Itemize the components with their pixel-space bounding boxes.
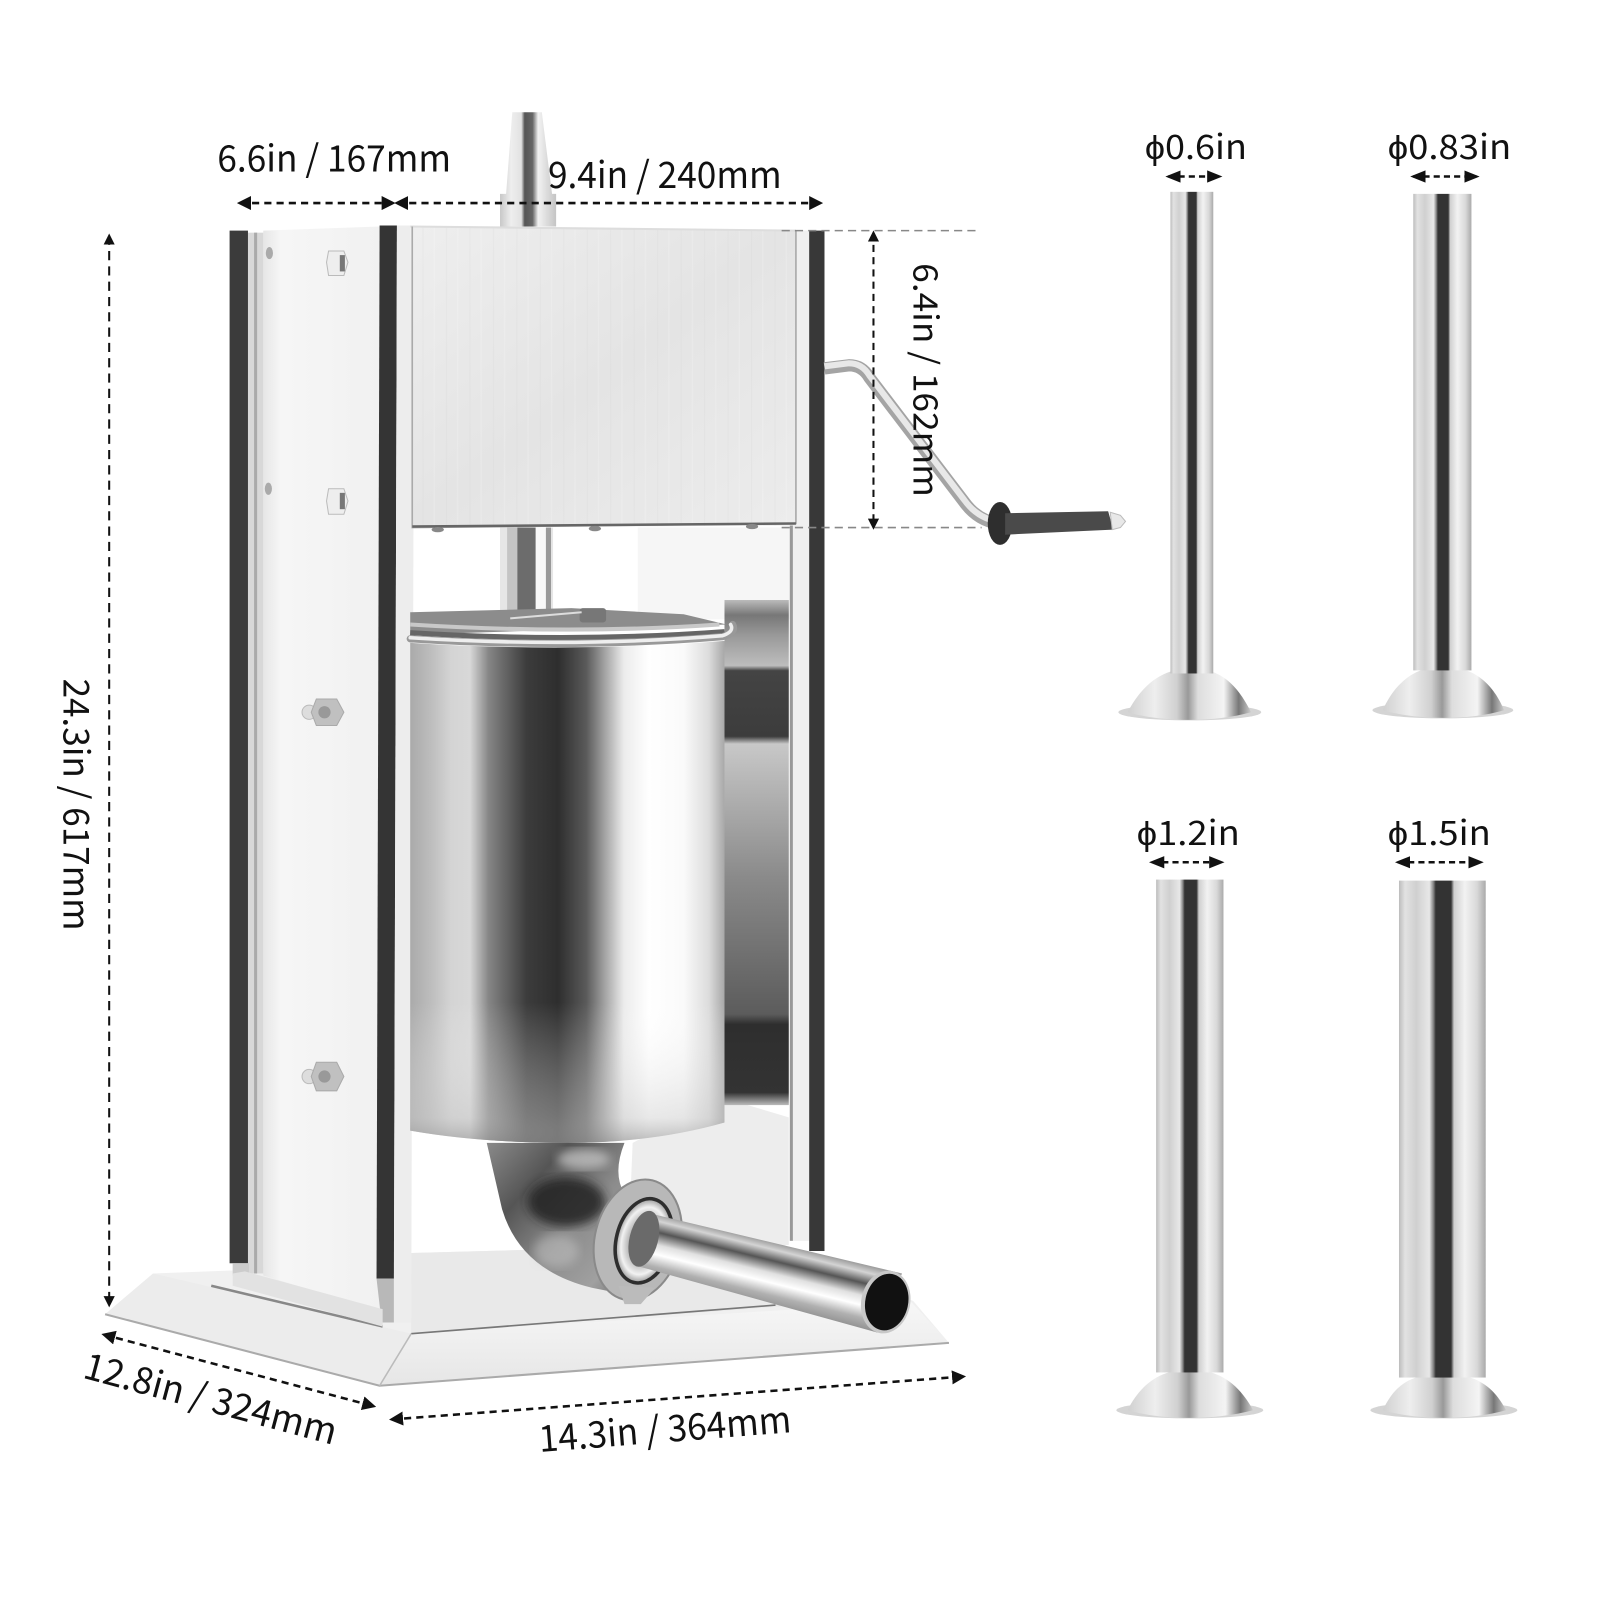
arrow [1413, 175, 1477, 178]
hopper cylinder [410, 624, 734, 1143]
label: ϕ1.2in [1137, 806, 1240, 855]
arrow [397, 202, 820, 204]
plunger rod [500, 528, 553, 619]
tube body [1156, 880, 1223, 1372]
label: ϕ1.5in [1388, 806, 1491, 855]
extension lines [782, 231, 982, 528]
dimension: 14.3in / 364mm [392, 1377, 963, 1463]
arrow [1152, 861, 1221, 863]
diameter label 1.5in [1388, 806, 1491, 862]
label: 9.4in / 240mm [548, 145, 782, 199]
tube body [1170, 192, 1213, 673]
base plate [105, 1243, 949, 1386]
hopper lid [410, 608, 727, 638]
arrow [1398, 861, 1481, 863]
tube dome [1128, 1369, 1253, 1418]
tube flange [1370, 1402, 1517, 1418]
attachment tube 0.83in [1372, 194, 1513, 718]
diameter label 0.6in [1145, 120, 1247, 177]
left side column [230, 226, 414, 1327]
attachment tube 0.6in [1118, 192, 1261, 720]
arrow [240, 202, 393, 204]
label: ϕ0.83in [1388, 120, 1511, 169]
label: 12.8in / 324mm [79, 1336, 344, 1456]
arrow [108, 236, 110, 1305]
crank handle [824, 363, 1126, 545]
tube dome [1383, 1373, 1506, 1418]
tube flange [1372, 702, 1513, 718]
elbow outlet [487, 1143, 624, 1294]
label: ϕ0.6in [1145, 120, 1247, 169]
attachment tube 1.2in [1116, 880, 1263, 1418]
tube flange [1118, 704, 1261, 720]
attachment tube 1.5in [1370, 881, 1517, 1418]
gear box cover [410, 227, 796, 532]
label: 14.3in / 364mm [536, 1389, 793, 1463]
bolts and holes [265, 247, 348, 1091]
diameter label 0.83in [1388, 120, 1511, 177]
label: 24.3in / 617mm [52, 679, 103, 931]
label: 6.4in / 162mm [903, 263, 952, 497]
product: sausage stuffer [105, 112, 1126, 1386]
diameter label 1.2in [1137, 806, 1240, 862]
arrow [104, 1335, 373, 1406]
tube body [1399, 881, 1486, 1378]
tube dome [1128, 668, 1251, 720]
dimension: 6.4in / 162mm [782, 231, 982, 528]
rear panel reflection [628, 528, 791, 1265]
arrow [1168, 175, 1219, 178]
top nozzle [500, 112, 556, 227]
outlet tube [623, 1208, 916, 1338]
arrow [872, 233, 874, 528]
arrow [392, 1377, 963, 1419]
tube dome [1383, 666, 1504, 718]
tube flange [1116, 1402, 1263, 1418]
tube body [1413, 194, 1471, 670]
right side column [790, 231, 824, 1251]
dimension: 12.8in / 324mm [79, 1335, 373, 1456]
label: 6.6in / 167mm [217, 128, 451, 182]
locking ring [581, 1170, 694, 1310]
